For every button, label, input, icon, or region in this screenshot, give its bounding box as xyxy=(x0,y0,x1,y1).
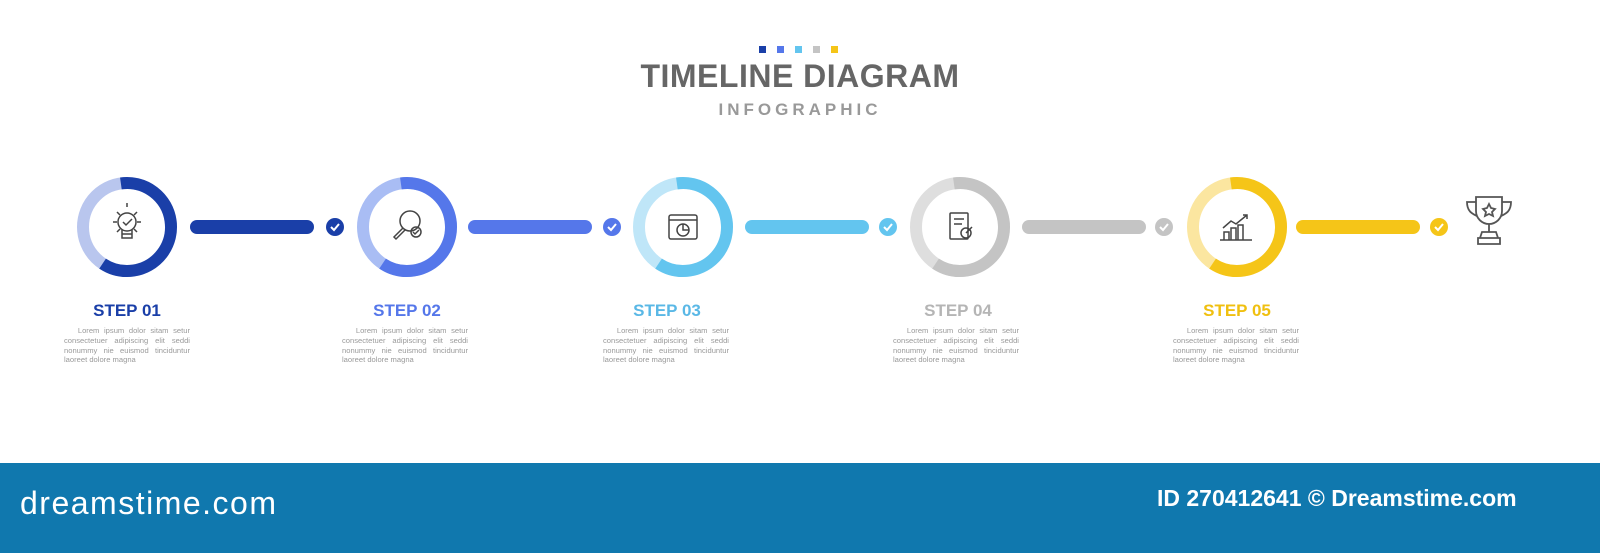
check 4 xyxy=(1155,218,1173,236)
connector 5 xyxy=(1296,220,1420,234)
text: STEP 03 xyxy=(633,301,701,320)
connector 3 xyxy=(745,220,869,234)
text: Lorem ipsum dolor sitam setur consectetuer adipiscing elit seddi nonummy nie euismod tinciduntur laoreet dolore magna xyxy=(603,326,729,364)
connector 2 xyxy=(468,220,592,234)
title: TIMELINE DIAGRAM xyxy=(640,58,960,94)
step 1 ring xyxy=(77,177,177,277)
step 2 ring xyxy=(357,177,457,277)
text: STEP 01 xyxy=(93,301,161,320)
icon: light bulb xyxy=(113,203,141,238)
footer band xyxy=(0,463,1600,553)
step 3 text xyxy=(603,301,729,364)
step 1 text xyxy=(64,301,190,364)
text: STEP 02 xyxy=(373,301,441,320)
step 2 text xyxy=(342,301,468,364)
subtitle: INFOGRAPHIC xyxy=(718,100,882,119)
text: STEP 05 xyxy=(1203,301,1271,320)
icon: growth chart xyxy=(1220,215,1252,240)
step 3 ring xyxy=(633,177,733,277)
connector 4 xyxy=(1022,220,1146,234)
footer logo: dreamstime.com xyxy=(20,485,278,521)
step 4 text xyxy=(893,301,1019,364)
icon: document target xyxy=(950,213,972,239)
legend dots xyxy=(759,46,838,53)
text: Lorem ipsum dolor sitam setur consectetuer adipiscing elit seddi nonummy nie euismod tinciduntur laoreet dolore magna xyxy=(893,326,1019,364)
icon: magnifier xyxy=(394,211,421,239)
check 1 xyxy=(326,218,344,236)
check 5 xyxy=(1430,218,1448,236)
text: Lorem ipsum dolor sitam setur consectetuer adipiscing elit seddi nonummy nie euismod tinciduntur laoreet dolore magna xyxy=(64,326,190,364)
icon: trophy xyxy=(1467,197,1511,244)
text: STEP 04 xyxy=(924,301,992,320)
footer id: ID 270412641 © Dreamstime.com xyxy=(1157,485,1517,511)
step 4 ring xyxy=(910,177,1010,277)
text: Lorem ipsum dolor sitam setur consectetuer adipiscing elit seddi nonummy nie euismod tinciduntur laoreet dolore magna xyxy=(1173,326,1299,364)
connector 1 xyxy=(190,220,314,234)
step 5 text xyxy=(1173,301,1299,364)
text: Lorem ipsum dolor sitam setur consectetuer adipiscing elit seddi nonummy nie euismod tinciduntur laoreet dolore magna xyxy=(342,326,468,364)
step 5 ring xyxy=(1187,177,1287,277)
check 2 xyxy=(603,218,621,236)
check 3 xyxy=(879,218,897,236)
icon: browser chart xyxy=(669,215,697,239)
